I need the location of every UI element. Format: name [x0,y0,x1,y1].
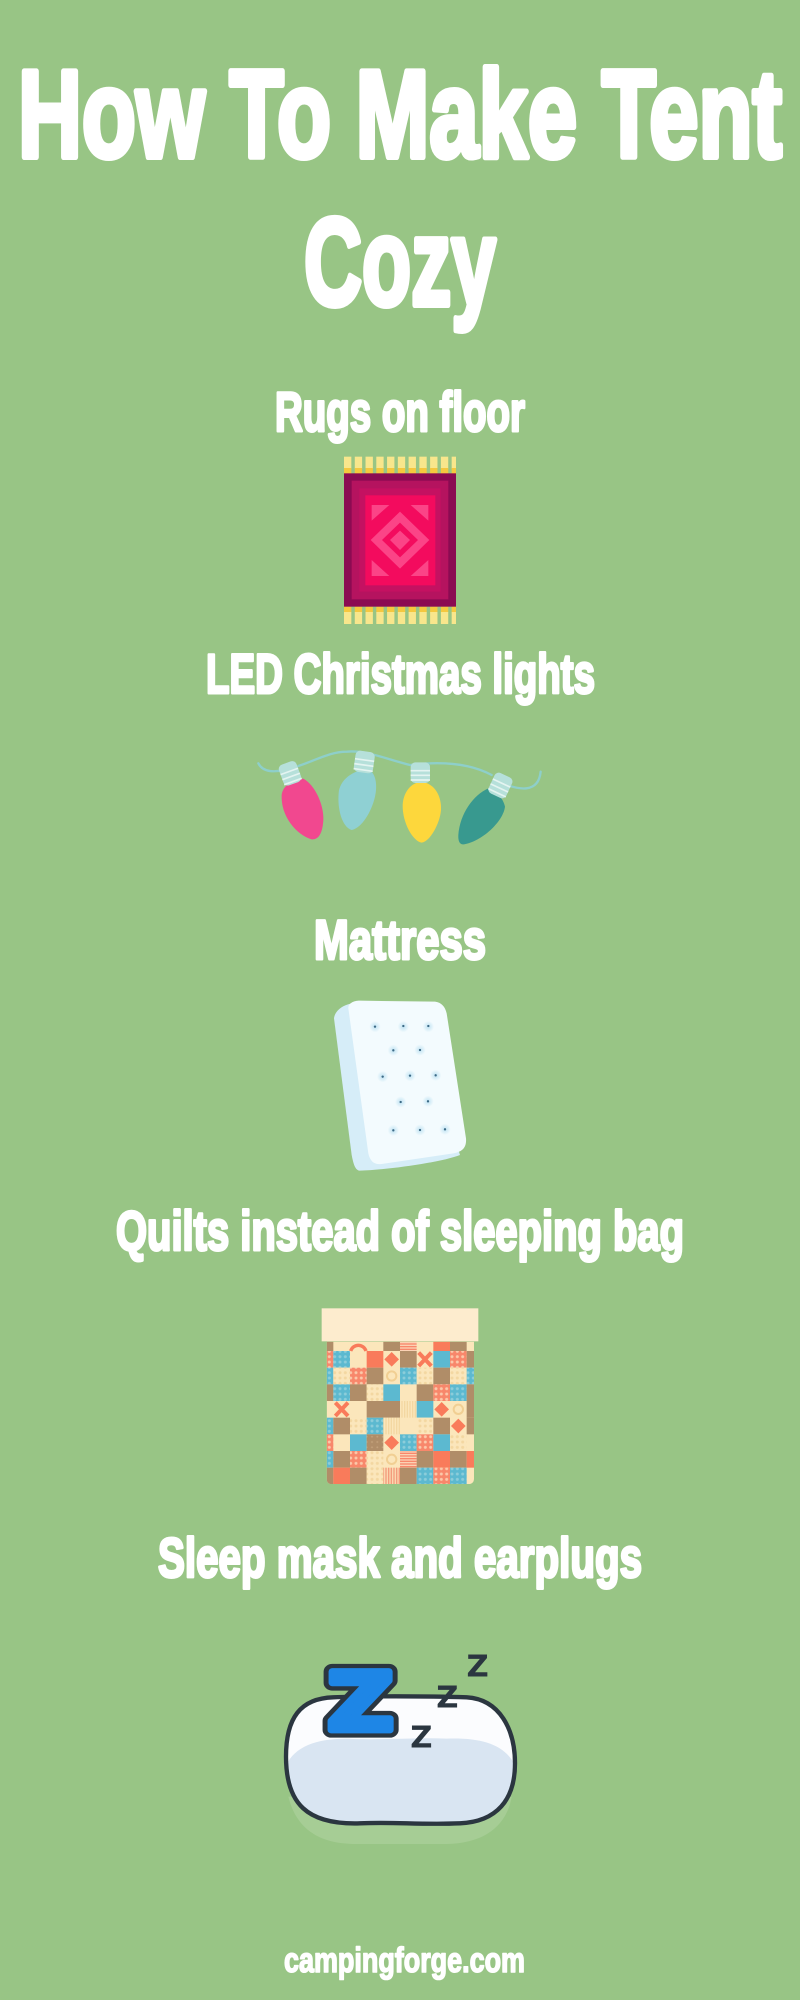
icon: christmas lights [258,750,541,844]
small z letters: Z [467,1650,489,1685]
heading: mattress: Mattress [314,908,486,971]
big blue Z: Z [327,1657,394,1749]
row 0 [327,1342,333,1351]
row 7 [327,1451,333,1468]
footer: campingforge.com: campingforge.com [284,1941,525,1980]
small z letters: Z [436,1680,458,1715]
row 5 [327,1418,333,1434]
heading: led christmas lights: LED Christmas lights [206,642,595,705]
heading: rugs on floor: Rugs on floor [275,380,525,443]
row 4 [335,1403,348,1416]
small z letters [410,1650,489,1755]
icon: sleeping pillow [283,1650,520,1844]
icon: mattress [334,1001,466,1171]
title: Cozy [304,194,496,332]
small z letters: Z [410,1720,432,1755]
row 6 [327,1434,333,1451]
big blue Z: Z [327,1657,394,1749]
row 1 [327,1351,333,1368]
row 8 [327,1468,333,1484]
icon: rug [344,457,456,624]
row 2 [327,1368,333,1384]
title [18,46,782,332]
icon: quilt [322,1308,478,1485]
mattress tufts [369,1021,451,1136]
row 3 [327,1384,333,1401]
